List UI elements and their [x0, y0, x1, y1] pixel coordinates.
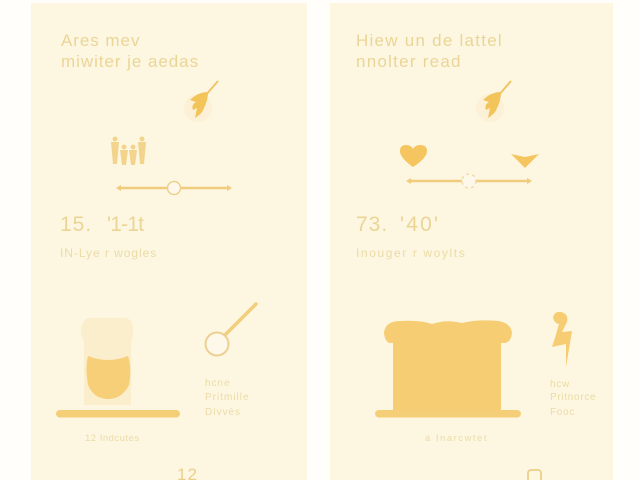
right note: Pritnorce	[550, 392, 596, 403]
base bar right	[375, 410, 521, 418]
icon: people	[111, 136, 146, 165]
icon: magnifier	[206, 304, 256, 356]
slider right	[406, 174, 532, 188]
left caption: 12 Indcutes	[85, 433, 140, 444]
right heading	[356, 31, 503, 71]
base bar left	[56, 410, 180, 418]
icon: lightning bolt	[552, 312, 572, 367]
right stat label: Inouger r woylts	[356, 246, 466, 260]
icon: heart	[400, 145, 427, 167]
left stat: '1-1t	[107, 213, 144, 236]
left note: hcne	[205, 378, 231, 389]
right page number	[528, 470, 541, 480]
left note: Dlvvés	[205, 407, 241, 418]
left heading	[61, 31, 199, 71]
icon: wheat left	[184, 81, 218, 122]
right stat: 73.	[356, 213, 388, 236]
panel: right	[330, 3, 613, 480]
left heading: miwiter je aedas	[61, 52, 199, 71]
right note	[550, 379, 596, 418]
icon: triangle marker	[511, 154, 539, 168]
right stat: '40'	[400, 213, 440, 236]
right note: Fooc	[550, 407, 575, 418]
left note: Pritmille	[205, 392, 250, 403]
left heading: Ares mev	[61, 31, 140, 50]
panel: left	[31, 3, 307, 480]
right caption: a Inarcwtet	[425, 433, 488, 444]
right heading: Hiew un de lattel	[356, 31, 503, 50]
slider left	[116, 182, 232, 194]
left note	[205, 378, 250, 418]
right heading: nnolter read	[356, 52, 462, 71]
icon: bread loaf	[384, 320, 512, 411]
icon: wheat right	[476, 81, 511, 122]
icon: bread slice with filling	[81, 318, 133, 405]
right note: hcw	[550, 379, 570, 390]
left stat label: IN-Lye r wogles	[60, 246, 157, 260]
left stat: 15.	[60, 213, 92, 236]
